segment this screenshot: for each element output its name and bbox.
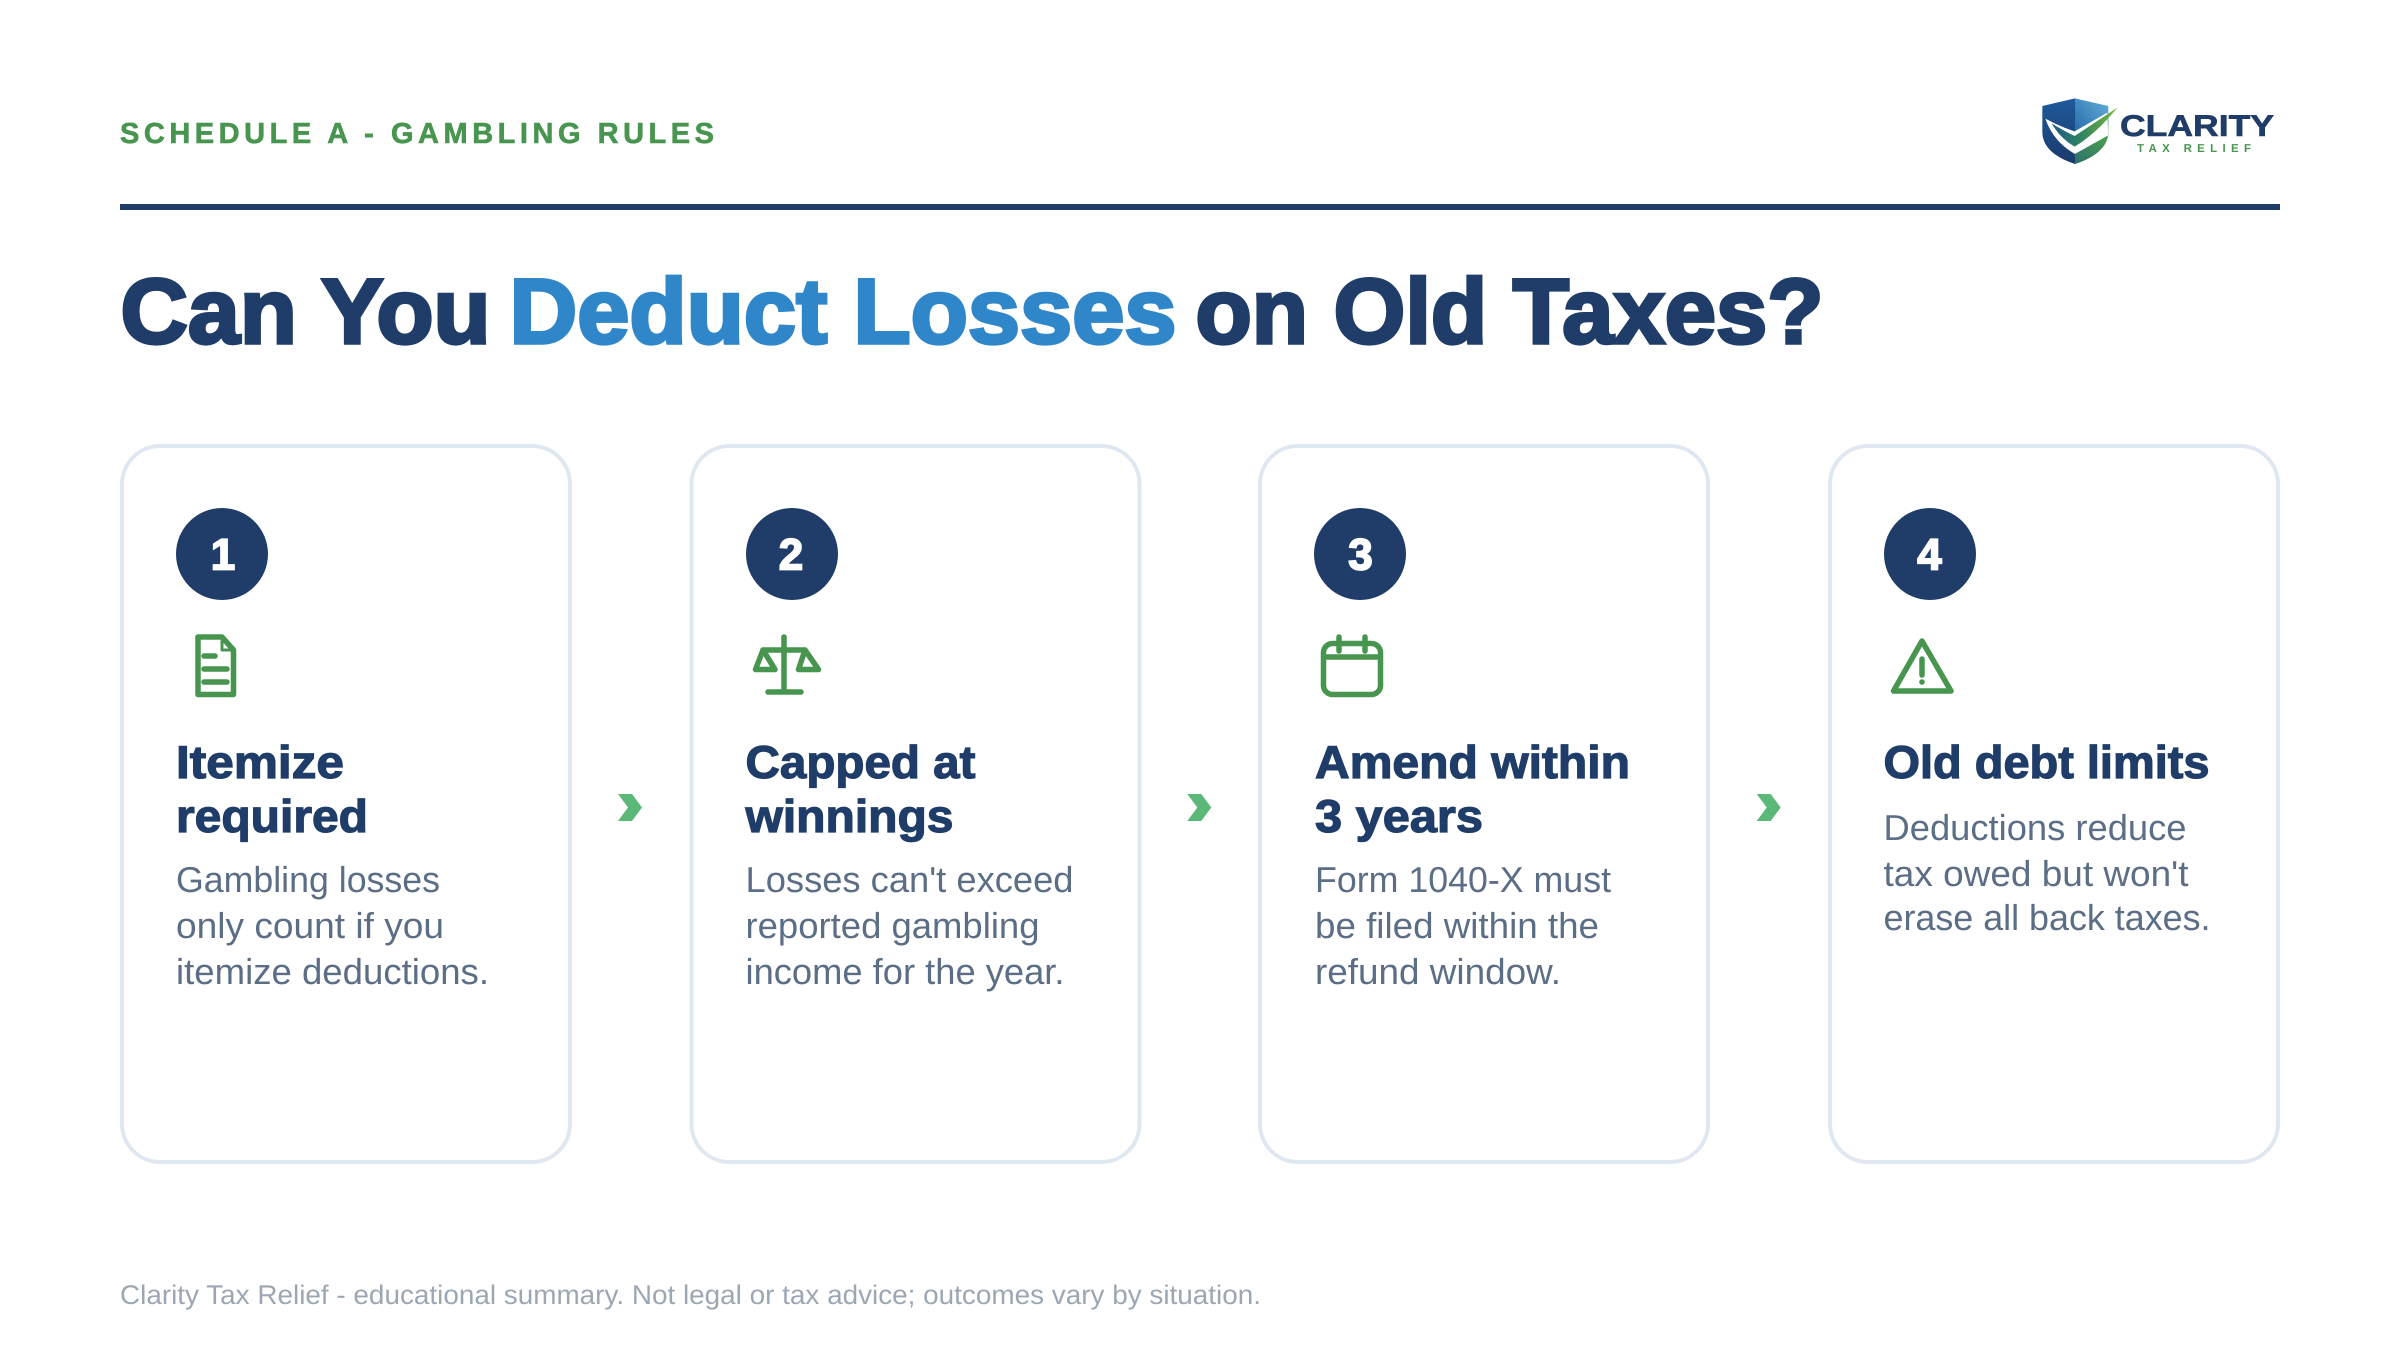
icon: document: [198, 637, 234, 694]
step 4 body: tax owed but won't: [1884, 853, 2188, 894]
step 1 body: only count if you: [176, 905, 444, 946]
step 4 body: Deductions reduce: [1884, 807, 2186, 848]
number badge 2: 2: [779, 530, 803, 580]
title: on Old Taxes?: [1196, 261, 1824, 363]
step 2 body: Losses can't exceed: [746, 859, 1074, 900]
step 2 body: [746, 859, 1074, 992]
step 2 heading: winnings: [744, 790, 954, 842]
footer disclaimer: Clarity Tax Relief - educational summary. Not legal or tax advice; outcomes vary by situation.: [120, 1280, 1261, 1310]
step 2 heading: [744, 736, 976, 842]
icon: scales: [756, 637, 818, 692]
number badge 4: [1884, 508, 1976, 600]
step 2 body: reported gambling: [746, 905, 1040, 946]
number badge 1: 1: [211, 530, 235, 580]
title: Can You: [120, 261, 490, 363]
step 3 body: refund window.: [1315, 951, 1561, 992]
step 1 body: [176, 859, 489, 992]
panel: step 2 capped at winnings: [692, 446, 1140, 1162]
step 2 body: income for the year.: [746, 951, 1064, 992]
arrow 1: [618, 794, 642, 821]
step 2 heading: Capped at: [746, 736, 976, 788]
card outline: [692, 446, 1140, 1162]
icon: calendar: [1324, 637, 1380, 694]
arrow 2: [1187, 794, 1211, 821]
step 4 body: erase all back taxes.: [1884, 897, 2210, 938]
logo: Clarity Tax Relief: [2042, 98, 2274, 164]
step 3 heading: [1315, 736, 1630, 842]
panel: step 4 old debt limits: [1830, 446, 2278, 1162]
step 1 heading: required: [176, 790, 368, 842]
step 3 body: be filed within the: [1315, 905, 1599, 946]
step 4 heading: Old debt limits: [1884, 736, 2210, 788]
step 3 body: Form 1040-X must: [1315, 859, 1611, 900]
step 1 body: itemize deductions.: [176, 951, 489, 992]
arrow 3: [1757, 794, 1781, 821]
card outline: [1830, 446, 2278, 1162]
step 3 heading: 3 years: [1315, 790, 1483, 842]
number badge 1: [176, 508, 268, 600]
step 1 heading: Itemize: [176, 736, 344, 788]
title: [120, 261, 1824, 363]
icon: shield with check: [2042, 98, 2117, 164]
step 3 body: [1315, 859, 1611, 992]
step 3 heading: Amend within: [1315, 736, 1630, 788]
card outline: [122, 446, 570, 1162]
icon: warning triangle: [1894, 641, 1951, 691]
title: Deduct Losses: [510, 261, 1176, 363]
number badge 3: [1314, 508, 1406, 600]
step 4 body: [1884, 807, 2210, 938]
logo tagline: TAX RELIEF: [2137, 143, 2251, 155]
panel: step 3 amend within 3 years: [1260, 446, 1708, 1162]
step 1 heading: [176, 736, 368, 842]
eyebrow label: SCHEDULE A - GAMBLING RULES: [120, 118, 714, 150]
header rule: [120, 204, 2280, 210]
number badge 3: 3: [1348, 530, 1373, 580]
panel: step 1 itemize required: [122, 446, 570, 1162]
card outline: [1260, 446, 1708, 1162]
step 1 body: Gambling losses: [176, 859, 440, 900]
number badge 4: 4: [1917, 530, 1942, 580]
logo wordmark: CLARITY: [2120, 110, 2274, 143]
number badge 2: [746, 508, 838, 600]
